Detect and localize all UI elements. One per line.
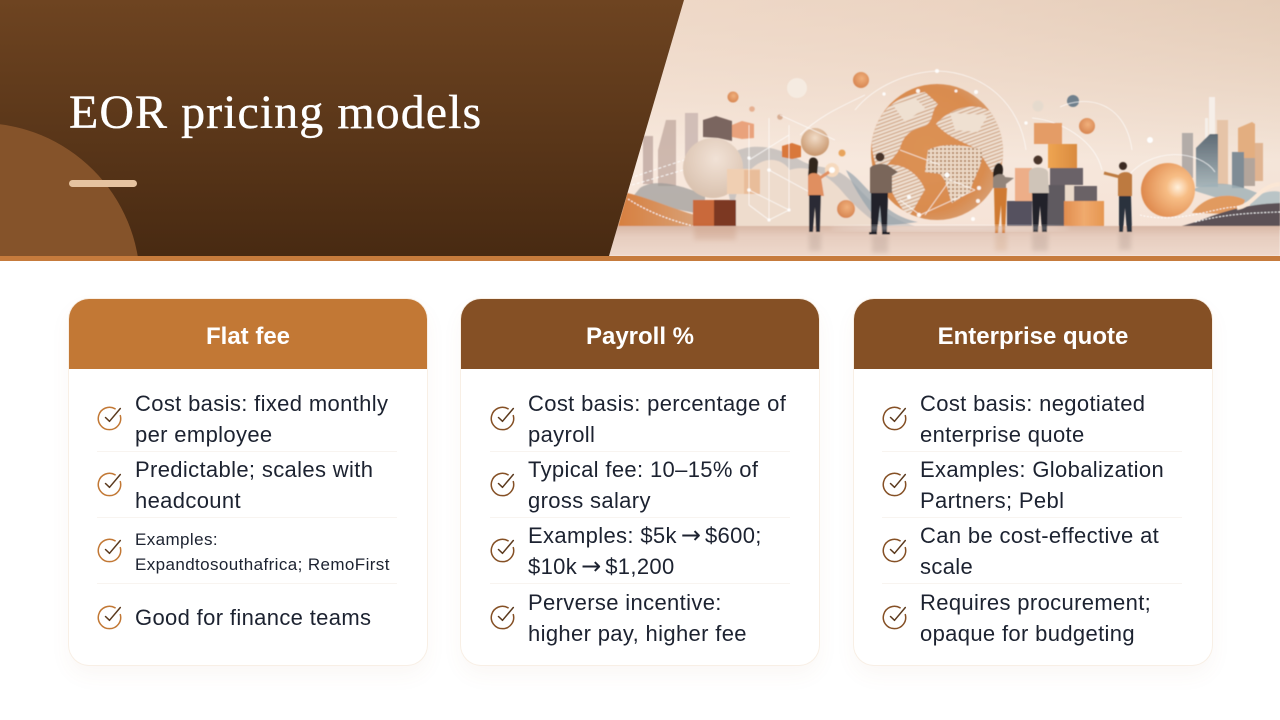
icon: check	[490, 472, 514, 496]
icon: check	[882, 472, 906, 496]
text: Requires procurement;	[920, 590, 1151, 615]
icon: check	[98, 538, 122, 562]
floor reflections	[694, 226, 1131, 253]
text: gross salary	[528, 488, 651, 513]
item: cost basis	[98, 391, 388, 447]
text: Typical fee: 10–15% of	[528, 457, 758, 482]
text: Cost basis: percentage of	[528, 391, 786, 416]
icon: check	[882, 538, 906, 562]
item: cost-effective	[882, 523, 1159, 579]
text	[920, 457, 1164, 513]
item: examples	[98, 530, 390, 574]
item: perverse incentive	[490, 590, 747, 646]
text	[920, 590, 1151, 646]
text: $10k→$1,200	[528, 552, 675, 580]
waves left	[618, 147, 918, 226]
text: enterprise quote	[920, 422, 1085, 447]
icon: check	[882, 606, 906, 630]
icon: check	[98, 472, 122, 496]
text: opaque for budgeting	[920, 621, 1135, 646]
text: higher pay, higher fee	[528, 621, 747, 646]
text	[528, 590, 747, 646]
person 3	[993, 163, 1014, 233]
item: cost basis	[490, 391, 786, 447]
header illustration	[609, 0, 1280, 256]
text	[135, 457, 373, 513]
icon: check	[882, 406, 906, 430]
icon: check	[98, 406, 122, 430]
heading: payroll percent: Payroll %	[586, 323, 694, 350]
heading: enterprise quote: Enterprise quote	[938, 323, 1128, 350]
header banner	[0, 0, 1280, 261]
text: Examples:	[135, 530, 218, 549]
globe	[871, 84, 1005, 220]
floating spheres	[728, 72, 1153, 218]
left boxes	[693, 116, 801, 226]
text: Examples: Globalization	[920, 457, 1164, 482]
text	[135, 530, 390, 574]
item: predictable	[98, 457, 373, 513]
decorative circle	[0, 124, 138, 256]
text: Cost basis: fixed monthly	[135, 391, 388, 416]
person 2	[869, 152, 898, 234]
icon: check	[490, 606, 514, 630]
heading: payroll percent	[461, 299, 819, 369]
text: scale	[920, 554, 973, 579]
item: cost basis	[882, 391, 1145, 447]
text: headcount	[135, 488, 241, 513]
heading: enterprise quote	[854, 299, 1212, 369]
item: procurement	[882, 590, 1151, 646]
big beige sphere	[683, 138, 743, 198]
panel: flat fee	[69, 299, 427, 665]
person 4	[1029, 156, 1049, 232]
text	[528, 457, 758, 513]
floor	[600, 226, 1280, 256]
text	[920, 391, 1145, 447]
text: Perverse incentive:	[528, 590, 722, 615]
item: typical fee	[490, 457, 758, 513]
item: examples	[882, 457, 1164, 513]
item: examples	[490, 521, 762, 580]
panel: payroll percent	[461, 299, 819, 665]
text: payroll	[528, 422, 595, 447]
text	[528, 391, 786, 447]
icon: check	[490, 406, 514, 430]
right boxes	[1007, 123, 1104, 226]
waves right	[1140, 184, 1280, 227]
floor glow	[830, 225, 1070, 231]
panel: enterprise quote	[854, 299, 1212, 665]
accent bar	[69, 180, 137, 187]
icon: check	[490, 538, 514, 562]
title: EOR pricing models	[69, 86, 482, 139]
glowing orb	[1141, 163, 1195, 217]
left skyline	[643, 113, 698, 186]
network nodes	[747, 69, 1028, 222]
text: Predictable; scales with	[135, 457, 373, 482]
text: Expandtosouthafrica; RemoFirst	[135, 555, 390, 574]
heading: flat fee: Flat fee	[206, 323, 290, 350]
icon: check	[98, 606, 122, 630]
network lines	[749, 71, 1215, 220]
text: Cost basis: negotiated	[920, 391, 1145, 416]
text	[920, 523, 1159, 579]
text	[528, 521, 762, 580]
text: per employee	[135, 422, 272, 447]
text: Good for finance teams	[135, 605, 371, 630]
text	[135, 391, 388, 447]
item: finance teams	[98, 605, 371, 630]
heading: flat fee	[69, 299, 427, 369]
people	[808, 152, 1132, 234]
orange strip	[0, 256, 1280, 261]
person 1	[808, 158, 829, 232]
text: Partners; Pebl	[920, 488, 1064, 513]
text: Examples: $5k→$600;	[528, 521, 762, 549]
person 5	[1104, 162, 1132, 232]
text: Can be cost-effective at	[920, 523, 1159, 548]
dark title panel	[0, 0, 684, 256]
right skyline	[1182, 97, 1263, 188]
